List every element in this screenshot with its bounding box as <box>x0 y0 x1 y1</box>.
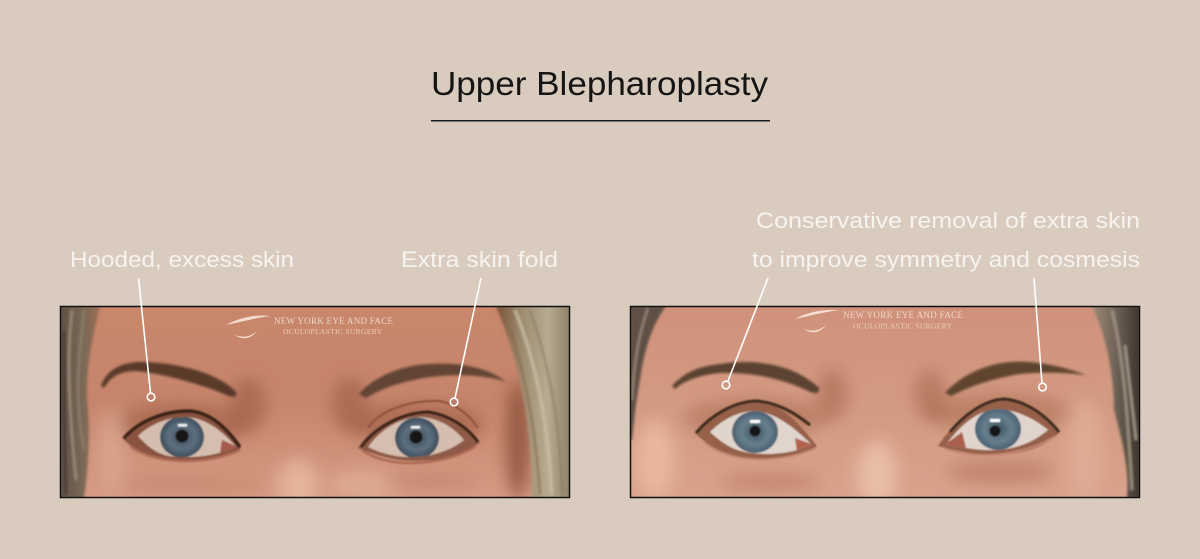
panel: after photo <box>630 306 1140 509</box>
watermark before: OCULOPLASTIC SURGERY <box>283 327 383 336</box>
face skin before <box>60 306 570 498</box>
after photo frame <box>630 306 1140 498</box>
face skin after <box>630 306 1140 498</box>
label: conservative removal <box>752 208 1140 272</box>
watermark after: OCULOPLASTIC SURGERY <box>853 322 953 330</box>
callout: skin fold pointer <box>450 278 481 406</box>
right eye after <box>938 398 1060 455</box>
left eye after <box>695 400 817 459</box>
hair right before <box>496 306 570 498</box>
label: conservative removal: Conservative removal of extra skin <box>756 208 1140 233</box>
title: Upper Blepharoplasty <box>431 65 769 102</box>
before photo frame <box>60 306 570 498</box>
hair right after <box>1092 306 1140 498</box>
callout: symmetry pointer <box>722 278 768 389</box>
hair left before <box>60 306 100 498</box>
title underline <box>431 120 770 122</box>
callout: cosmesis pointer <box>1034 278 1046 391</box>
watermark after: NEW YORK EYE AND FACE <box>843 310 964 320</box>
watermark after <box>795 310 964 332</box>
panel: before photo <box>60 306 570 511</box>
watermark before: NEW YORK EYE AND FACE <box>274 316 394 326</box>
shading after <box>635 369 1103 509</box>
watermark before <box>226 315 394 338</box>
callout: hooded skin pointer <box>138 278 155 401</box>
hair left after <box>630 306 666 440</box>
left eye before <box>122 410 241 461</box>
eyebrows after <box>672 362 1086 396</box>
label: hooded, excess skin: Hooded, excess skin <box>70 247 294 272</box>
label: conservative removal: to improve symmetry and cosmesis <box>752 247 1140 272</box>
label: extra skin fold: Extra skin fold <box>401 247 558 272</box>
eyebrows before <box>101 362 506 398</box>
shading before <box>98 377 530 511</box>
right eye before <box>358 401 480 463</box>
